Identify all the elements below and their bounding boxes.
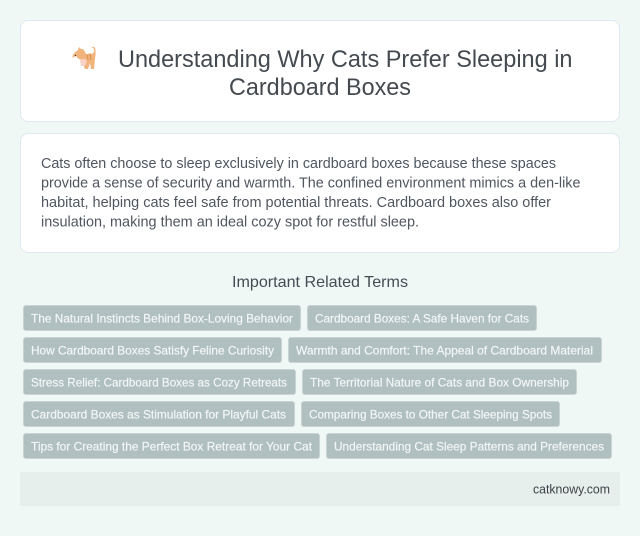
- tag: Understanding Cat Sleep Patterns and Preferences: [334, 440, 604, 454]
- title: Cardboard Boxes: [229, 74, 411, 101]
- heading: related terms: Important Related Terms: [232, 274, 408, 291]
- tag: How Cardboard Boxes Satisfy Feline Curiosity: [31, 344, 274, 358]
- tag: [24, 402, 294, 426]
- tag: [288, 338, 602, 362]
- tag: Cardboard Boxes: A Safe Haven for Cats: [315, 312, 529, 326]
- tag: Cardboard Boxes as Stimulation for Playful Cats: [31, 408, 286, 422]
- tag: Tips for Creating the Perfect Box Retreat for Your Cat: [31, 440, 313, 454]
- footer text: site name: catknowy.com: [533, 482, 610, 496]
- text block: description: Cats often choose to sleep exclusively in cardboard boxes because these spaces: [41, 156, 556, 172]
- text block: description: provide a sense of security and warmth. The confined environment mimics a den-like: [41, 176, 580, 192]
- tag: [308, 306, 536, 330]
- tag: [302, 402, 560, 426]
- tag: [24, 338, 282, 362]
- text block: description: insulation, making them an ideal cozy spot for restful sleep.: [41, 214, 419, 230]
- text block: description: habitat, helping cats feel safe from potential threats. Cardboard boxes also offer: [41, 195, 551, 211]
- text block: description: [41, 156, 580, 230]
- tag: [326, 434, 612, 458]
- tag: The Territorial Nature of Cats and Box Ownership: [310, 376, 569, 390]
- title: Understanding Why Cats Prefer Sleeping in: [118, 46, 572, 73]
- icon: orange cat: [73, 47, 96, 69]
- tag: [24, 306, 300, 330]
- tag: Stress Relief: Cardboard Boxes as Cozy Retreats: [31, 376, 287, 390]
- tag: [302, 370, 576, 394]
- title: [118, 46, 572, 101]
- tag: Comparing Boxes to Other Cat Sleeping Spots: [309, 408, 552, 422]
- panel: description: [20, 134, 620, 252]
- panel: title card: [20, 20, 620, 122]
- footer: [20, 472, 620, 506]
- tag list: [24, 306, 612, 458]
- tag: [24, 370, 296, 394]
- tag: Warmth and Comfort: The Appeal of Cardboard Material: [296, 344, 593, 358]
- tag: The Natural Instincts Behind Box-Loving Behavior: [31, 312, 293, 326]
- tag: [24, 434, 320, 458]
